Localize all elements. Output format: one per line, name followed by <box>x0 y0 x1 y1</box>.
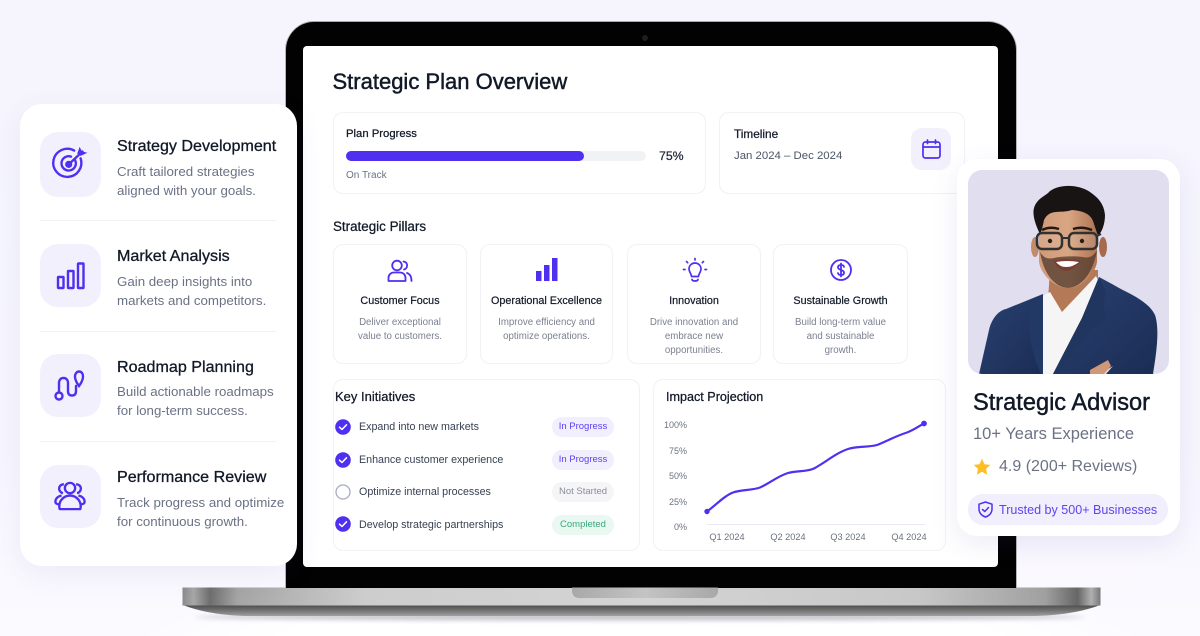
service title: Roadmap Planning <box>117 358 254 376</box>
advisor experience: 10+ Years Experience <box>973 425 1134 443</box>
advisor rating: 4.9 (200+ Reviews) <box>999 458 1137 475</box>
service text: for long-term success. <box>117 403 248 418</box>
status pill <box>552 450 614 470</box>
pillar text: opportunities. <box>665 344 723 356</box>
panel: key initiatives <box>333 379 640 551</box>
icon: route <box>40 354 101 417</box>
panel: operational excellence <box>480 244 613 364</box>
pillar text <box>650 316 738 356</box>
service text: for continuous growth. <box>117 514 248 529</box>
icon: star <box>974 458 990 475</box>
icon: target <box>40 132 101 197</box>
x axis labels: Q2 2024 <box>770 532 806 542</box>
initiative row 1 <box>335 417 614 437</box>
panel: timeline <box>719 112 965 194</box>
hinge notch <box>572 588 718 598</box>
service: roadmap planning <box>40 354 274 418</box>
x axis labels: Q4 2024 <box>891 532 927 542</box>
line chart <box>704 420 927 525</box>
service text <box>117 274 266 308</box>
service text: Gain deep insights into <box>117 274 252 289</box>
heading: key initiatives: Key Initiatives <box>335 389 415 404</box>
status pill: Not Started <box>559 486 607 497</box>
pillar text: optimize operations. <box>503 330 590 342</box>
pillar text <box>498 316 595 342</box>
service text: markets and competitors. <box>117 293 266 308</box>
pillar text: growth. <box>825 344 856 356</box>
icon: bars <box>40 244 101 307</box>
service text <box>117 164 256 198</box>
panel: services card <box>20 104 297 566</box>
pillar text: value to customers. <box>358 330 442 342</box>
camera <box>642 35 648 41</box>
portrait <box>968 170 1169 374</box>
pillar text: Improve efficiency and <box>498 316 595 328</box>
status pill <box>552 417 614 437</box>
icon: dollar <box>830 259 852 281</box>
service title: Performance Review <box>117 468 266 486</box>
service text: Track progress and optimize <box>117 495 284 510</box>
x axis labels: Q1 2024 <box>709 532 745 542</box>
icon: calendar <box>911 128 951 170</box>
initiative name: Enhance customer experience <box>359 454 503 466</box>
panel: sustainable growth <box>773 244 908 364</box>
service text: aligned with your goals. <box>117 183 256 198</box>
y axis labels: 100% <box>664 420 687 430</box>
status pill: In Progress <box>559 454 607 465</box>
initiative name: Optimize internal processes <box>359 486 491 498</box>
laptop base <box>182 588 1100 623</box>
check icon <box>335 419 351 435</box>
pillar title: Sustainable Growth <box>793 294 888 306</box>
pillar title: Innovation <box>669 294 719 306</box>
pillar text: Drive innovation and <box>650 316 738 328</box>
pillar title: Operational Excellence <box>491 294 602 306</box>
pillar text: and sustainable <box>807 330 874 342</box>
check icon <box>335 516 351 532</box>
laptop lid <box>286 22 1016 588</box>
service text: Build actionable roadmaps <box>117 384 274 399</box>
pillar title: Customer Focus <box>360 294 440 306</box>
panel: impact projection <box>653 379 946 551</box>
timeline dates: Jan 2024 – Dec 2024 <box>734 150 842 162</box>
title: Strategic Plan Overview <box>332 69 567 94</box>
heading: strategic pillars: Strategic Pillars <box>333 219 426 234</box>
y axis labels: 50% <box>669 471 687 481</box>
pillar text: Deliver exceptional <box>359 316 441 328</box>
status pill <box>552 515 614 535</box>
service: strategy development <box>40 132 276 198</box>
plan progress label: Plan Progress <box>346 128 417 140</box>
x axis labels: Q3 2024 <box>830 532 866 542</box>
panel: innovation <box>627 244 761 364</box>
service title: Strategy Development <box>117 137 276 155</box>
icon: team <box>40 465 101 528</box>
check icon <box>335 452 351 468</box>
initiative name: Develop strategic partnerships <box>359 519 503 531</box>
badge text: Trusted by 500+ Businesses <box>999 503 1157 517</box>
advisor name: Strategic Advisor <box>973 390 1150 416</box>
initiative name: Expand into new markets <box>359 421 479 433</box>
x axis labels <box>709 532 927 542</box>
timeline label: Timeline <box>734 127 778 141</box>
status pill: In Progress <box>559 421 607 432</box>
service text <box>117 384 274 418</box>
initiative row 4 <box>335 515 614 535</box>
initiative row 3 <box>335 482 614 502</box>
service: market analysis <box>40 244 266 308</box>
status pill <box>552 482 614 502</box>
pillar text <box>795 316 886 356</box>
icon: shield <box>978 501 993 518</box>
pillar text: Build long-term value <box>795 316 886 328</box>
laptop <box>182 21 1100 623</box>
icon: bulb <box>682 258 708 282</box>
initiative row 2 <box>335 450 614 470</box>
y axis labels: 25% <box>669 496 687 506</box>
trust badge <box>968 494 1168 525</box>
service: performance review <box>40 465 284 529</box>
panel: plan progress <box>333 112 706 194</box>
progress status: On Track <box>346 170 387 180</box>
progress bar <box>346 151 646 161</box>
y axis labels: 0% <box>674 522 687 532</box>
y axis labels <box>664 420 687 532</box>
icon: customer <box>388 260 412 282</box>
service title: Market Analysis <box>117 247 230 265</box>
screen <box>303 46 998 567</box>
empty check icon <box>335 484 351 500</box>
service text: Craft tailored strategies <box>117 164 254 179</box>
pillar text: embrace new <box>665 330 723 342</box>
y axis labels: 75% <box>669 446 687 456</box>
pillar text <box>358 316 442 342</box>
panel: advisor card <box>957 159 1180 536</box>
service text <box>117 495 284 529</box>
status pill: Completed <box>560 519 606 530</box>
progress value: 75% <box>659 149 684 163</box>
heading: impact projection: Impact Projection <box>666 390 763 404</box>
panel: customer focus <box>333 244 467 364</box>
icon: bars <box>536 258 558 281</box>
